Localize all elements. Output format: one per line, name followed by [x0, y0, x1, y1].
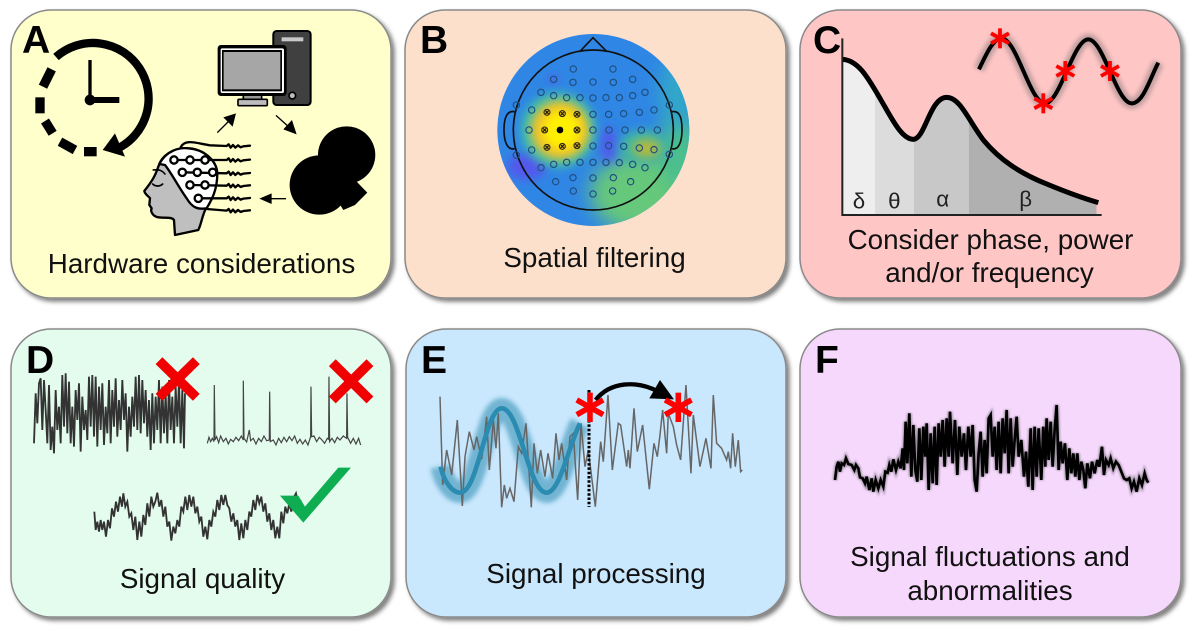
panel C caption	[848, 224, 1133, 288]
panel C caption: and/or frequency	[885, 257, 1094, 288]
panel E letter: E	[421, 339, 447, 382]
panel F letter: F	[815, 339, 839, 382]
panel E: signal processing	[406, 329, 786, 617]
panel C caption: Consider phase, power	[848, 224, 1133, 255]
fitted teal oscillation	[441, 408, 580, 493]
panel F caption	[850, 541, 1130, 606]
head outline with nose and ears	[504, 38, 682, 210]
icon: head with EEG cap and wires	[144, 142, 250, 235]
icon: red cross 2	[332, 363, 370, 400]
icon: red cross 1	[159, 361, 196, 397]
delta label: δ	[853, 189, 865, 214]
arrow: stimulator to head	[259, 193, 286, 204]
panel C background	[800, 10, 1181, 298]
icon: green check mark	[280, 468, 351, 523]
selected electrodes	[542, 109, 580, 150]
panel A letter: A	[22, 19, 50, 62]
panel B background	[405, 10, 786, 298]
theta label: θ	[888, 189, 901, 214]
spectrum curve	[842, 59, 1098, 203]
frequency bands	[843, 62, 1096, 214]
fluctuating signal trace	[835, 405, 1148, 492]
panel F background	[800, 329, 1181, 617]
panel B letter: B	[420, 19, 448, 62]
alpha label: α	[936, 187, 949, 212]
panel D: signal quality	[11, 329, 391, 617]
prediction arrow and markers	[577, 380, 692, 422]
fitted oscillation halo	[441, 408, 580, 493]
panel E caption: Signal processing	[486, 558, 706, 589]
panel B caption: Spatial filtering	[503, 242, 686, 273]
dotted time marker	[588, 390, 590, 507]
arrow: computer to stimulator	[276, 115, 297, 134]
panel C letter: C	[813, 19, 841, 62]
power spectrum chart	[842, 38, 1102, 215]
spiky signal trace	[207, 377, 361, 445]
panel D letter: D	[26, 339, 54, 382]
panel F caption: Signal fluctuations and	[850, 541, 1130, 572]
sine wave with red phase markers	[979, 28, 1158, 113]
arrow: head to computer	[217, 113, 236, 133]
raw EEG trace	[440, 385, 742, 507]
panel A: hardware considerations	[11, 10, 391, 298]
scalp heat map	[497, 34, 690, 226]
beta label: β	[1019, 187, 1032, 212]
panel F: signal fluctuations	[800, 329, 1181, 617]
panel A background	[11, 10, 391, 298]
central target electrode	[557, 127, 563, 133]
icon: clock with dashed arrow	[40, 43, 149, 157]
icon: figure-of-eight coil	[290, 126, 375, 215]
panel B: spatial filtering	[405, 10, 786, 298]
panel D background	[11, 329, 391, 617]
panel C: phase, power and frequency	[800, 10, 1181, 298]
noisy signal trace	[34, 373, 185, 453]
panel E background	[406, 329, 786, 617]
panel D caption: Signal quality	[120, 563, 285, 594]
axes	[842, 38, 1102, 215]
electrodes	[513, 66, 672, 197]
icon: desktop computer	[218, 31, 311, 106]
panel F caption: abnormalities	[907, 575, 1073, 606]
clean oscillating signal trace	[94, 493, 301, 541]
topographic head map	[497, 34, 690, 226]
panel A caption: Hardware considerations	[48, 248, 355, 279]
